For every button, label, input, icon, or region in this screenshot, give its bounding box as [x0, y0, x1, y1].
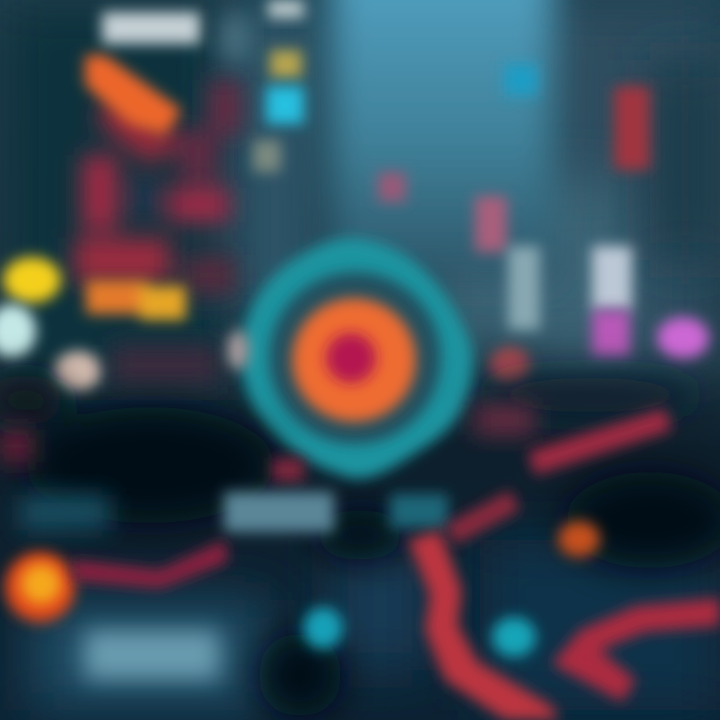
grey blue block: [224, 492, 334, 532]
panel: left red building: [74, 80, 242, 295]
red streak left: [72, 540, 228, 588]
orange light right: [558, 521, 600, 557]
orange ball: [5, 552, 75, 622]
white tall sign: [592, 246, 632, 310]
pale glow left of ring: [227, 330, 249, 370]
pale tall sign: [508, 246, 540, 330]
target ring: [241, 238, 473, 479]
teal block: [390, 494, 448, 528]
pale tower: [222, 15, 248, 60]
light sky column: [330, 0, 555, 280]
orange yellow bar: [86, 280, 186, 320]
pink sign small: [378, 172, 406, 202]
orange diagonal sign: [85, 55, 182, 135]
purple glow right: [657, 317, 709, 359]
red diagonal streak right: [528, 408, 672, 475]
red haze by ring: [475, 405, 535, 435]
pink tall sign: [475, 196, 507, 252]
pale pink glow: [54, 351, 102, 391]
left mid red haze: [110, 345, 220, 385]
yellow light: [270, 50, 302, 78]
cyan light left: [303, 607, 343, 649]
teal arc left: [20, 495, 110, 530]
cyan sign upper right: [504, 64, 538, 96]
white sign top: [102, 12, 200, 44]
ring inner dark: [269, 272, 441, 444]
red road right: [552, 598, 720, 702]
red winding road: [408, 530, 560, 720]
pale sign top: [268, 0, 304, 18]
crimson centre: [326, 333, 376, 383]
red upper road branch: [450, 500, 515, 535]
red left mark: [0, 430, 32, 462]
pale cyan glow: [0, 304, 36, 358]
orange disc: [292, 298, 416, 422]
yellow glow: [3, 257, 61, 303]
cyan light right: [492, 617, 536, 657]
salmon light: [490, 347, 530, 383]
ring outer: [241, 238, 473, 479]
grey light: [253, 140, 281, 172]
purple sign: [592, 310, 630, 356]
pale blue block bottom: [84, 630, 220, 680]
red small mark below ring: [272, 458, 304, 482]
dark ground blobs: [0, 375, 720, 717]
dark tower right of sky: [650, 60, 720, 260]
red tall sign: [614, 86, 650, 170]
cyan light: [266, 86, 304, 124]
